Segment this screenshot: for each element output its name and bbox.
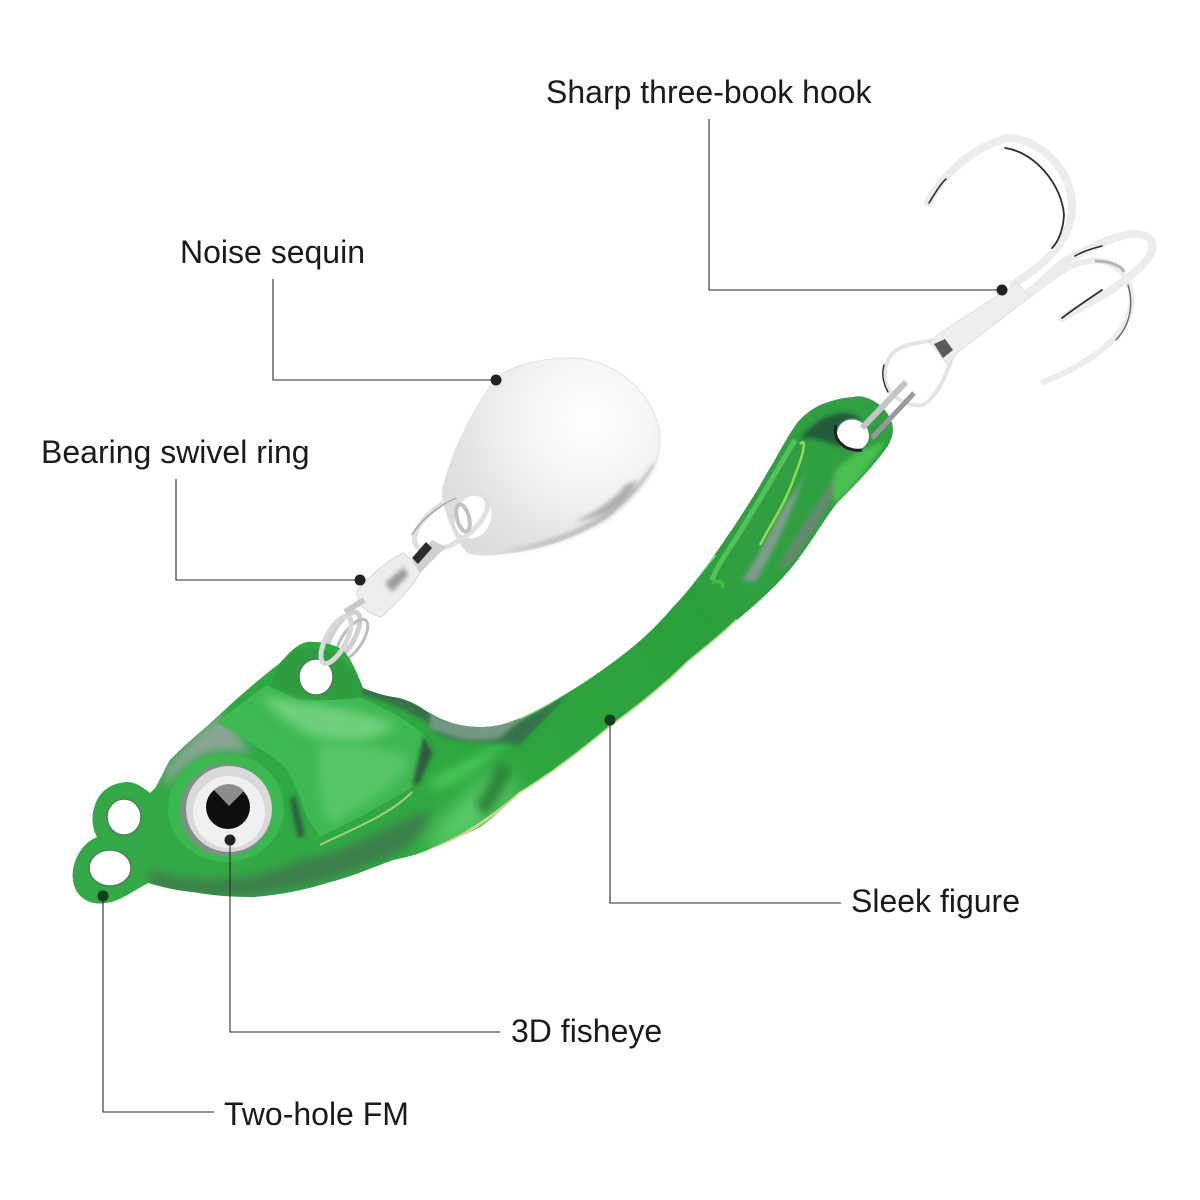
callout: bearing swivel ring: Bearing swivel ring — [41, 434, 310, 470]
icon: noise sequin — [442, 358, 660, 555]
callout: sharp three-book hook — [546, 74, 1008, 296]
stem lower bright area — [425, 770, 520, 855]
head lower dark band — [150, 810, 430, 896]
head grey shoulder — [165, 715, 250, 790]
stem upper end — [794, 401, 890, 564]
stem edge highlights — [520, 555, 715, 718]
callout: noise sequin: Noise sequin — [180, 234, 365, 270]
callout: two-hole FM: Two-hole FM — [224, 1096, 409, 1132]
sequin hole — [449, 490, 497, 544]
icon: treble hook — [883, 138, 1152, 405]
head lug shading — [270, 648, 363, 700]
callout: 3D fisheye: 3D fisheye — [511, 1013, 662, 1049]
body holes — [89, 413, 876, 886]
icon: 3D fisheye — [186, 766, 272, 852]
head fold lower highlight — [320, 792, 412, 845]
icon: ring at tail end — [862, 382, 914, 438]
neck dark band — [362, 686, 570, 745]
callout: sleek figure — [604, 714, 1020, 919]
icon: green lure body — [73, 396, 893, 904]
callout: sleek figure: Sleek figure — [851, 883, 1020, 919]
icon: ring at head lug — [315, 612, 357, 668]
callout: 3D fisheye — [224, 834, 662, 1049]
callout: sharp three-book hook: Sharp three-book hook — [546, 74, 873, 110]
hook shank — [930, 283, 1030, 365]
icon: bearing swivel — [319, 482, 497, 667]
callout: bearing swivel ring — [41, 434, 366, 586]
eye socket — [168, 754, 284, 862]
callout: noise sequin — [180, 234, 502, 386]
callout: two-hole FM — [98, 890, 409, 1132]
stem dark streak — [480, 765, 505, 810]
head light panel — [217, 685, 433, 837]
